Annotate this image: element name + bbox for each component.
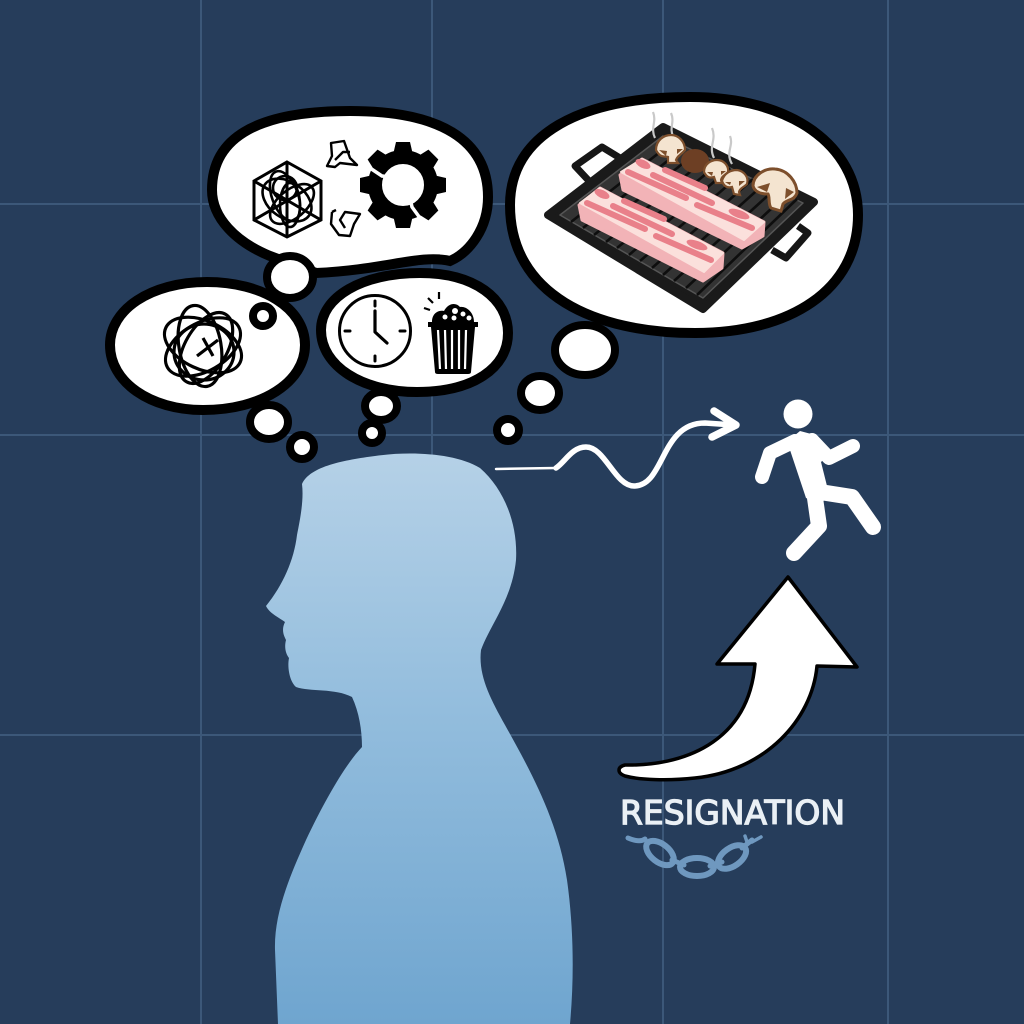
thought bubble: clock and popcorn bin	[321, 273, 508, 392]
person silhouette	[266, 454, 573, 1024]
mushroom 2	[704, 160, 728, 183]
icon: tangled cube	[254, 162, 321, 237]
icon: clock	[340, 296, 410, 366]
bacon strip lower	[579, 187, 723, 281]
bacon strip upper	[620, 157, 764, 248]
label: resignation: RESIGNATION	[620, 793, 845, 832]
patty	[681, 149, 709, 173]
icon: ring	[253, 306, 273, 326]
thought bubble: tangled atom	[110, 282, 305, 410]
wavy arrow	[496, 411, 736, 486]
icon: grill pan	[548, 127, 814, 309]
thought dots: connector	[250, 256, 615, 459]
thought bubble: tangled cube and broken gear	[212, 111, 488, 273]
large curved arrow	[619, 577, 857, 780]
icon: popcorn bin	[424, 292, 478, 374]
icon: crumpled paper top	[327, 141, 357, 167]
icon: tangled atom	[155, 302, 251, 392]
icon: running figure	[762, 400, 873, 553]
thought bubble: grilled bacon and mushrooms	[510, 97, 858, 333]
mushroom 1	[656, 135, 685, 163]
mushroom 4	[753, 169, 797, 211]
icon: broken chain	[628, 836, 761, 876]
icon: crumpled paper bottom	[331, 210, 360, 236]
steam	[653, 112, 732, 164]
mushroom 3	[722, 170, 747, 195]
icon: broken gear	[360, 142, 446, 228]
